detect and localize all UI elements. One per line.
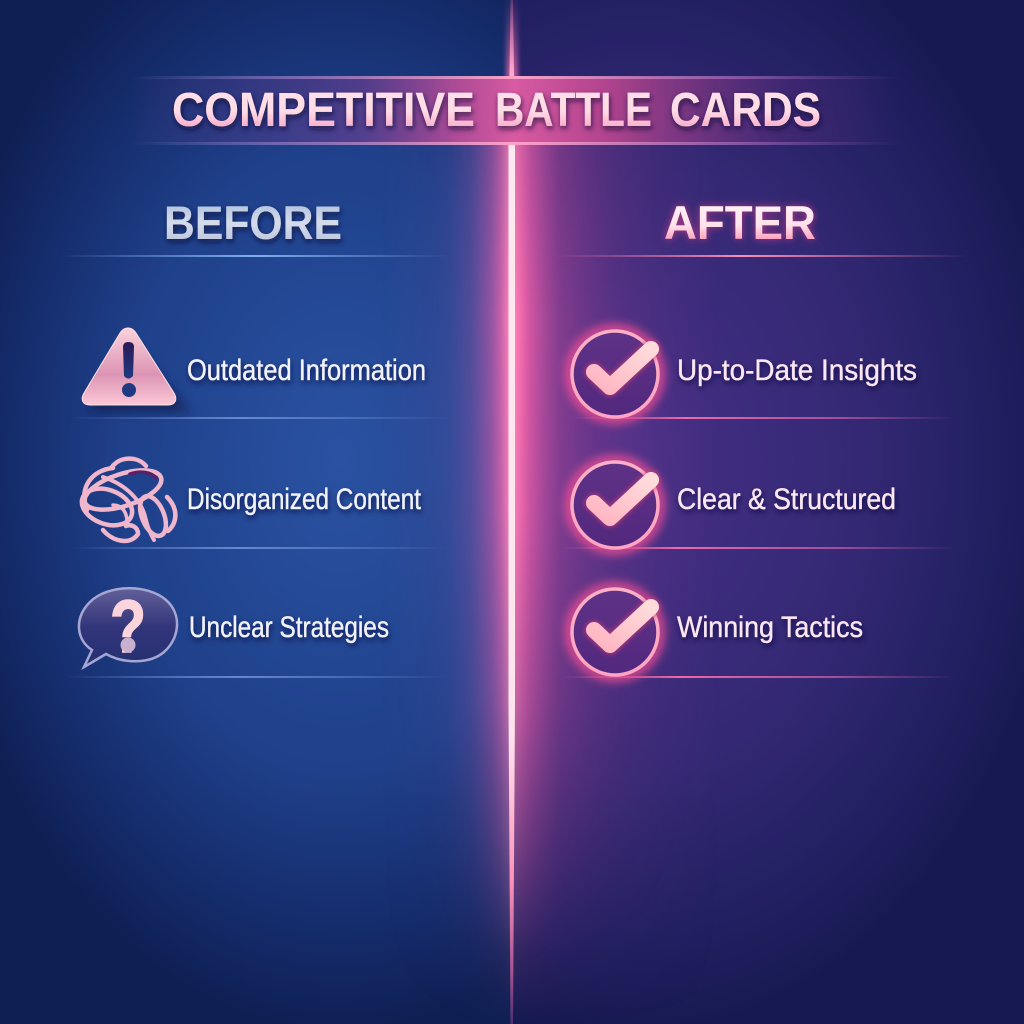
title: COMPETITIVE	[172, 84, 475, 137]
text: up-to-date insights: Up-to-Date Insights	[677, 354, 917, 387]
text: outdated information: Outdated Information	[187, 354, 426, 387]
title banner	[130, 76, 900, 145]
text: disorganized content: Disorganized Content	[187, 483, 422, 516]
text: clear and structured: Clear & Structured	[677, 483, 896, 516]
text: unclear strategies: Unclear Strategies	[189, 611, 389, 644]
icon: question speech bubble	[79, 585, 177, 668]
before heading: BEFORE	[164, 196, 342, 249]
title: CARDS	[670, 84, 821, 137]
icon: check circle 2	[570, 460, 660, 550]
icon: warning triangle	[82, 328, 190, 412]
icon: check circle 1	[570, 329, 660, 419]
icon: tangled scribble	[77, 459, 175, 541]
icon: question speech bubble: ?	[110, 585, 146, 668]
icon: check circle 3	[570, 587, 660, 677]
text: winning tactics: Winning Tactics	[677, 611, 863, 644]
after heading: AFTER	[664, 196, 816, 249]
title: BATTLE	[495, 84, 652, 137]
row dividers	[65, 417, 955, 678]
central glowing divider	[380, 0, 720, 1024]
